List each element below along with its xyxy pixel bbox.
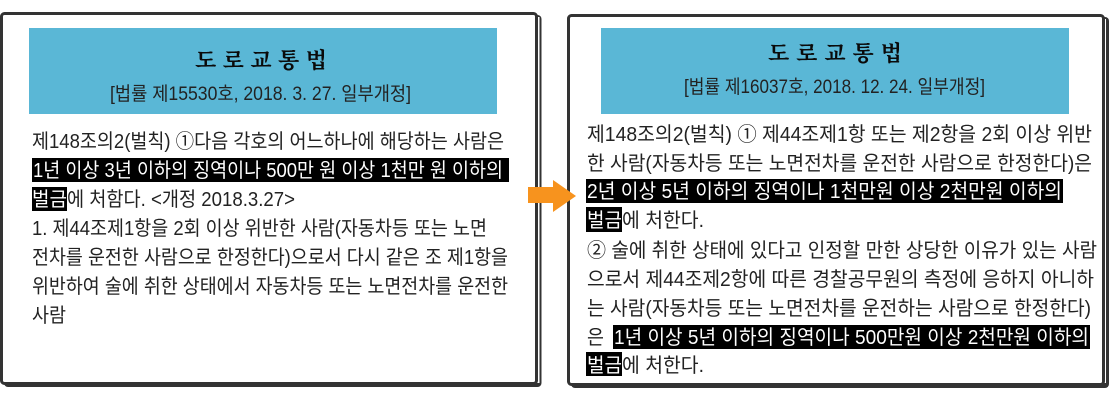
body text: previous article: 1. 제44조제1항을 2회 이상 위반한 사람(자동차등 또는 노면: [32, 217, 487, 240]
body text: amended article: [586, 123, 1097, 377]
subtitle: [법률 제15530호, 2018. 3. 27. 일부개정]: [110, 83, 411, 105]
body text: previous article: 제148조의2(벌칙) ①다음 각호의 어느하나에 해당하는 사람은: [32, 130, 504, 153]
body text: previous article: 에 처함다. <개정 2018.3.27>: [67, 188, 295, 211]
body text: amended article: 으로서 제44조제2항에 따른 경찰공무원의 측정에 응하지 아니하: [587, 268, 1094, 291]
body text: previous article: 전차를 운전한 사람으로 한정한다)으로서 다시 같은 조 제1항을: [32, 246, 508, 269]
body text: previous article: 사람: [32, 304, 66, 327]
body text: amended article: 은: [587, 327, 604, 349]
body text: amended article: 2년 이상 5년 이하의 징역이나 1천만원 이상 2천만원 이하의: [587, 180, 1062, 203]
panel: previous law: [2, 14, 542, 387]
body text: previous article: 벌금: [32, 188, 67, 211]
body text: amended article: 제148조의2(벌칙) ① 제44조제1항 또는 제2항을 2회 이상 위반: [587, 123, 1092, 146]
header: previous law: [29, 28, 497, 114]
body text: amended article: 벌금: [587, 354, 622, 377]
title: 도로교통법: [195, 44, 327, 75]
arrow: [528, 180, 576, 212]
body text: amended article: 한 사람(자동차등 또는 노면전차를 운전한 사람으로 한정한다)은: [587, 152, 1092, 175]
header: amended law: [601, 28, 1069, 114]
body text: amended article: 벌금: [587, 209, 622, 232]
panel: amended law: [568, 16, 1109, 388]
body text: amended article: 1년 이상 5년 이하의 징역이나 500만원 이상 2천만원 이하의: [614, 326, 1089, 349]
body text: amended article: 에 처한다.: [622, 209, 704, 232]
body text: previous article: 위반하여 술에 취한 상태에서 자동차등 또는 노면전차를 운전한: [32, 275, 508, 298]
subtitle: [법률 제16037호, 2018. 12. 24. 일부개정]: [684, 76, 985, 98]
body text: amended article: 는 사람(자동차등 또는 노면전차를 운전하는 사람으로 한정한다): [587, 297, 1091, 320]
body text: amended article: ② 술에 취한 상태에 있다고 인정할 만한 상당한 이유가 있는 사람: [587, 239, 1097, 262]
body text: amended article: 에 처한다.: [622, 354, 704, 377]
body text: previous article: [32, 130, 509, 327]
body text: previous article: 1년 이상 3년 이하의 징역이나 500만 원 이상 1천만 원 이하의: [33, 159, 503, 182]
title: 도로교통법: [768, 37, 902, 68]
